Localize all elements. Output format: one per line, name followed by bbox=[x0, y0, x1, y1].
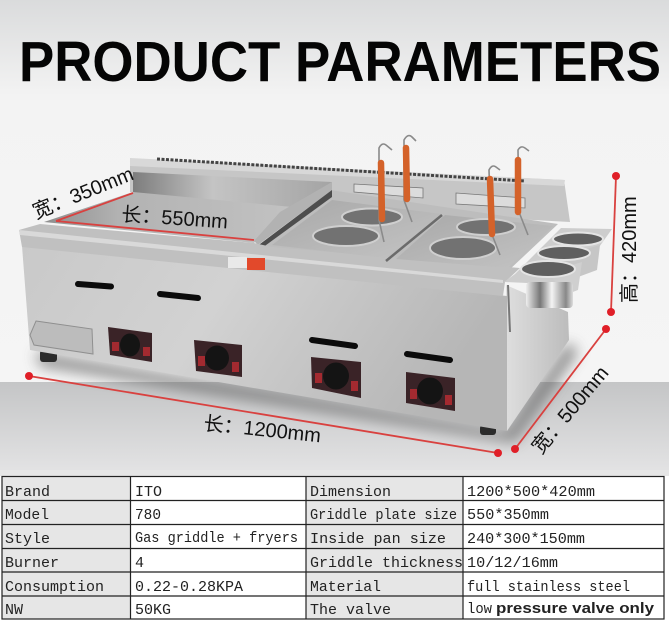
label: height: 高：420mm bbox=[618, 196, 641, 303]
bracket bbox=[508, 285, 510, 332]
row: burner: Burner bbox=[5, 555, 59, 572]
knob panel 3 bbox=[311, 357, 361, 398]
drawer bbox=[30, 321, 93, 354]
steel cups bbox=[521, 232, 603, 308]
left fryer lid bbox=[272, 200, 442, 258]
feet bbox=[40, 350, 496, 435]
row: net weight: pressure valve only bbox=[496, 600, 655, 617]
vent slots bbox=[78, 284, 450, 360]
fryer base deck bbox=[256, 190, 558, 272]
fryer back panels bbox=[354, 184, 423, 198]
floor bbox=[0, 382, 669, 472]
side panel bbox=[506, 285, 569, 431]
row: net weight bbox=[5, 600, 655, 619]
depth line bbox=[511, 325, 610, 453]
row: net weight: The valve bbox=[310, 602, 391, 619]
row: net weight: 50KG bbox=[135, 602, 171, 619]
grid lines bbox=[2, 476, 664, 619]
row: style: 240*300*150mm bbox=[467, 531, 585, 548]
row: model: 550*350mm bbox=[467, 507, 549, 524]
row: net weight: NW bbox=[5, 602, 23, 619]
fryer baskets bbox=[313, 208, 515, 259]
basket handles bbox=[379, 136, 529, 255]
row: burner: 4 bbox=[135, 555, 144, 572]
row: consumption bbox=[5, 579, 630, 596]
griddle side guard bbox=[254, 182, 332, 248]
row: brand: Dimension bbox=[310, 484, 391, 501]
row: style: Inside pan size bbox=[310, 531, 446, 548]
row: model: Model bbox=[5, 507, 49, 524]
specification table bbox=[2, 476, 664, 619]
knob panel 4 bbox=[406, 372, 455, 411]
right fryer lid bbox=[396, 215, 553, 268]
row: style: Gas griddle + fryers bbox=[135, 530, 298, 547]
row: consumption: Material bbox=[310, 579, 381, 596]
row: brand: 1200*500*420mm bbox=[467, 484, 595, 501]
griddle plate bbox=[44, 192, 292, 243]
front panel bbox=[22, 246, 507, 431]
table band bbox=[0, 470, 669, 620]
row: consumption: Consumption bbox=[5, 579, 104, 596]
label cells bbox=[2, 476, 463, 619]
row: burner: Griddle thickness bbox=[310, 555, 463, 572]
divider bbox=[386, 215, 442, 261]
height line bbox=[607, 172, 620, 316]
griddle back wall bbox=[133, 172, 332, 208]
row: brand: ITO bbox=[135, 484, 162, 501]
label: overall length: 长：1200mm bbox=[202, 412, 322, 447]
row: model bbox=[5, 507, 549, 524]
row: style: Style bbox=[5, 531, 50, 548]
knob panel 1 bbox=[108, 327, 152, 362]
side cup rack bbox=[504, 228, 612, 285]
row: consumption: full stainless steel bbox=[467, 579, 630, 596]
brand label bbox=[228, 257, 265, 270]
dimension lines bbox=[25, 172, 620, 457]
row: consumption: 0.22-0.28KPA bbox=[135, 579, 243, 596]
row: model: 780 bbox=[135, 507, 161, 524]
knob panel 2 bbox=[194, 340, 242, 377]
griddle fryer machine bbox=[19, 136, 612, 442]
label: depth: 宽：500mm bbox=[527, 362, 613, 458]
row: style bbox=[5, 530, 585, 548]
overall length line bbox=[25, 372, 502, 457]
label: griddle length: 长：550mm bbox=[121, 203, 229, 233]
griddle depth line bbox=[56, 193, 133, 221]
row: burner: 10/12/16mm bbox=[467, 555, 558, 572]
front rim bbox=[19, 224, 520, 296]
row: net weight: low bbox=[467, 601, 492, 618]
row: burner bbox=[5, 555, 558, 572]
row: brand: Brand bbox=[5, 484, 50, 501]
vent strip bbox=[157, 159, 525, 181]
row: brand bbox=[5, 484, 595, 501]
background bbox=[0, 0, 669, 382]
back splash bbox=[130, 160, 570, 222]
floor shadow bbox=[35, 342, 578, 442]
label: griddle depth: 宽：350mm bbox=[29, 162, 137, 224]
griddle length line bbox=[56, 221, 254, 240]
row: model: Griddle plate size bbox=[310, 507, 457, 524]
